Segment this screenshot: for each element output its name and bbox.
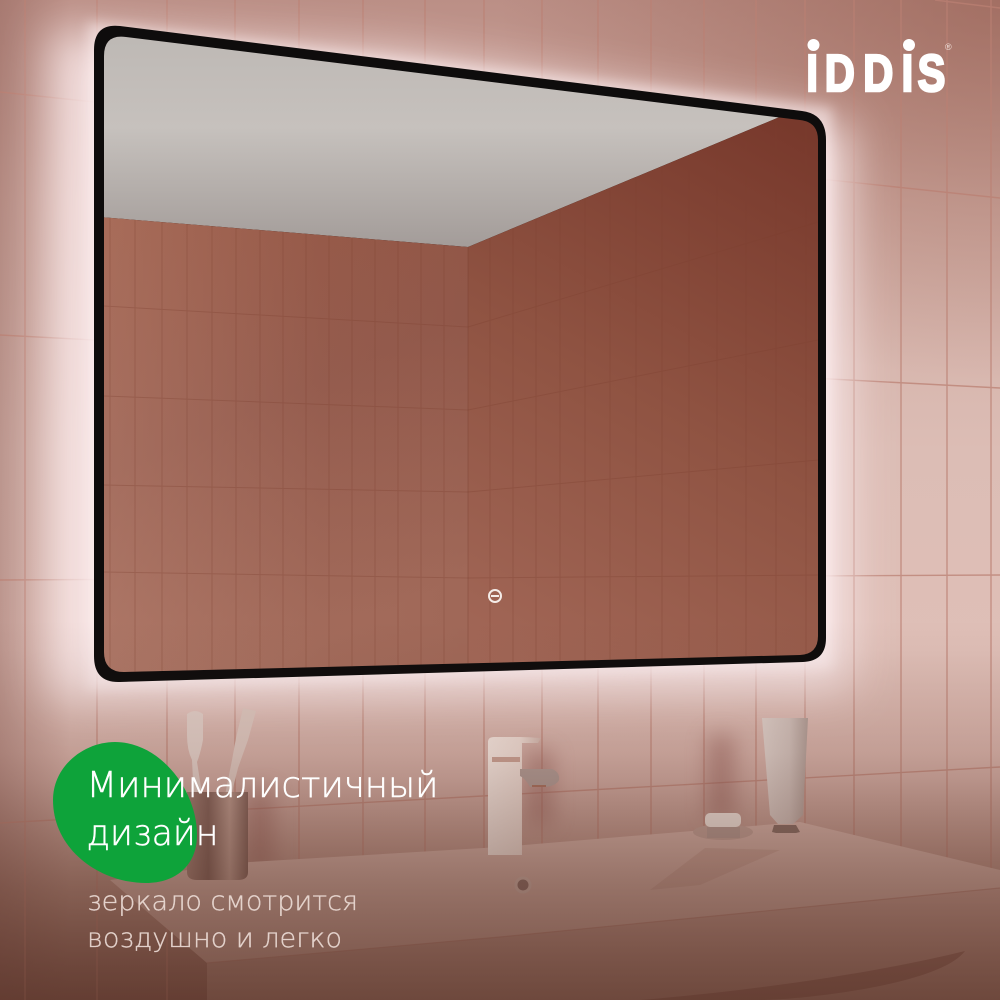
heading <box>86 765 438 854</box>
reflected right wall <box>468 116 825 680</box>
subheading <box>87 886 358 954</box>
basin front panel <box>207 888 1000 1000</box>
logo: IDDIS <box>806 44 945 102</box>
cream tube <box>762 718 808 833</box>
heading: Минималистичный <box>86 765 438 806</box>
mirror frame <box>94 26 826 682</box>
reflected left wall <box>100 217 468 680</box>
soap dish <box>693 813 753 840</box>
reflected ceiling <box>104 36 779 247</box>
basin shadow curve <box>640 951 965 1000</box>
mirror backlight glow <box>50 22 850 700</box>
basin top surface <box>110 822 1000 963</box>
bottom darkening <box>0 620 1000 1000</box>
green blob accent <box>53 742 197 883</box>
faucet <box>488 737 559 855</box>
vanity basin <box>110 822 1000 1000</box>
logo: ® <box>945 42 952 52</box>
toothbrush cup <box>187 708 256 880</box>
toothbrushes <box>187 708 256 800</box>
object shadows on wall <box>248 735 734 870</box>
touch sensor button <box>489 590 501 602</box>
heading: дизайн <box>86 813 218 854</box>
mirror reflection <box>100 30 830 680</box>
subheading: зеркало смотрится <box>87 886 358 917</box>
mirror <box>94 26 830 682</box>
subheading: воздушно и легко <box>87 923 342 954</box>
drain <box>514 876 532 894</box>
